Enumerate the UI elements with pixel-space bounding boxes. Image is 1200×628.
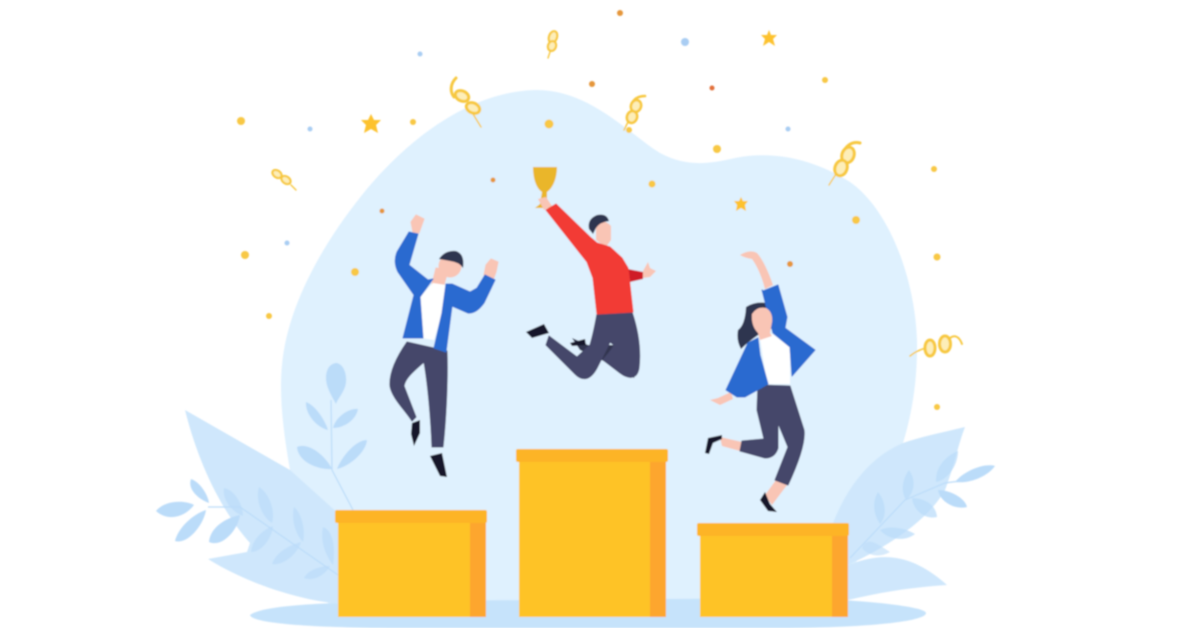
- right foliage: [833, 427, 995, 600]
- streamer 3: [547, 30, 559, 58]
- centre podium body: [519, 460, 650, 617]
- confetti dots: [237, 10, 940, 410]
- left podium body: [338, 520, 470, 617]
- centre man hair: [589, 215, 609, 234]
- right podium body: [700, 533, 832, 617]
- woman shoes: [705, 435, 777, 512]
- person: left man: [390, 215, 498, 477]
- centre man hands: [538, 197, 656, 278]
- streamer 4: [624, 96, 645, 130]
- left podium cap: [335, 510, 487, 523]
- lower right leaf: [846, 557, 947, 600]
- yellow dots: [237, 77, 940, 410]
- ground shadow: [250, 598, 926, 628]
- centre man shoe: [526, 324, 549, 338]
- woman hair: [737, 303, 785, 349]
- podium: right: [697, 523, 849, 617]
- centre podium side: [650, 460, 666, 617]
- large left leaf: [185, 410, 340, 604]
- background blob: [281, 90, 917, 610]
- left man jacket: [395, 232, 495, 352]
- right podium cap: [697, 523, 849, 536]
- large right leaf: [833, 427, 965, 566]
- back leg: [572, 338, 640, 378]
- left man shoes: [411, 420, 447, 477]
- woman lower legs: [720, 437, 787, 505]
- woman shirt: [760, 334, 790, 384]
- centre man sweater: [546, 204, 633, 314]
- woman trousers: [740, 385, 804, 485]
- streamer 6: [910, 336, 962, 356]
- left man hair: [439, 251, 463, 268]
- woman jacket: [726, 285, 815, 397]
- blue dots: [284, 38, 790, 246]
- centre man trousers: [546, 312, 640, 379]
- woman face: [752, 308, 772, 340]
- streamer 2: [271, 168, 296, 190]
- centre man neck and face: [596, 222, 611, 247]
- left man shirt: [420, 283, 446, 340]
- left branch with leaves: [156, 479, 338, 579]
- right branch with leaves: [850, 451, 995, 558]
- left man trousers: [390, 342, 447, 447]
- streamer 1: [451, 78, 481, 127]
- podium: centre: [516, 449, 668, 617]
- centre podium cap: [516, 449, 668, 462]
- streamer 5: [829, 143, 860, 185]
- left man hands and neck: [411, 215, 498, 285]
- right podium side: [832, 533, 848, 617]
- woman raised arm: [740, 251, 773, 289]
- back shoe: [570, 339, 586, 346]
- trophy: [533, 167, 557, 208]
- left podium side: [470, 520, 486, 617]
- back sleeve: [628, 269, 643, 282]
- person: woman: [705, 251, 815, 512]
- woman lower hand: [710, 392, 733, 405]
- confetti streamers: [271, 30, 962, 356]
- stars: [361, 30, 777, 211]
- left foliage: [156, 363, 367, 604]
- podium: left: [335, 510, 487, 617]
- orange dots: [380, 10, 793, 267]
- left man head: [438, 254, 462, 278]
- person: centre man with trophy: [526, 167, 656, 379]
- upright left sprig: [297, 363, 367, 510]
